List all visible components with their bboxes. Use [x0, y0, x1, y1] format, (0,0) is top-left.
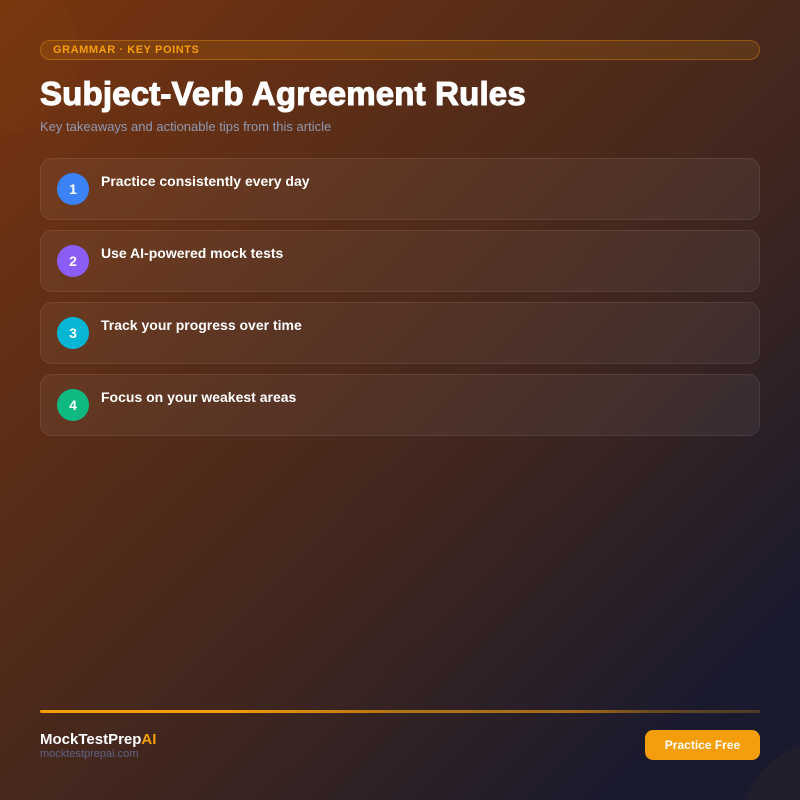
icon: number 4: 4 — [69, 397, 77, 413]
badge: category label: GRAMMAR · KEY POINTS — [53, 44, 199, 56]
panel: tip 2 — [40, 230, 760, 292]
panel: tip 1 — [40, 158, 760, 220]
icon: number 3: 3 — [69, 325, 77, 341]
title: Subject-Verb Agreement Rules — [40, 75, 526, 112]
call to action button: Practice Free — [665, 738, 740, 752]
tip text 2: Use AI-powered mock tests — [101, 245, 283, 261]
subtitle: Key takeaways and actionable tips from this article — [40, 119, 331, 134]
icon: number 1: 1 — [69, 181, 77, 197]
icon: number 2 — [57, 245, 89, 277]
call to action button — [645, 730, 760, 760]
panel: tip 4 — [40, 374, 760, 436]
icon: number 4 — [57, 389, 89, 421]
icon: number 1 — [57, 173, 89, 205]
badge: category label — [40, 40, 760, 60]
footer accent bar — [40, 710, 760, 713]
tip text 3: Track your progress over time — [101, 317, 302, 333]
icon: number 3 — [57, 317, 89, 349]
tip text 4: Focus on your weakest areas — [101, 389, 296, 405]
icon: number 2: 2 — [69, 253, 77, 269]
brand name: MockTestPrepAI — [40, 731, 156, 748]
tip text 1: Practice consistently every day — [101, 173, 310, 189]
brand url: mocktestprepai.com — [40, 748, 138, 760]
panel: tip 3 — [40, 302, 760, 364]
